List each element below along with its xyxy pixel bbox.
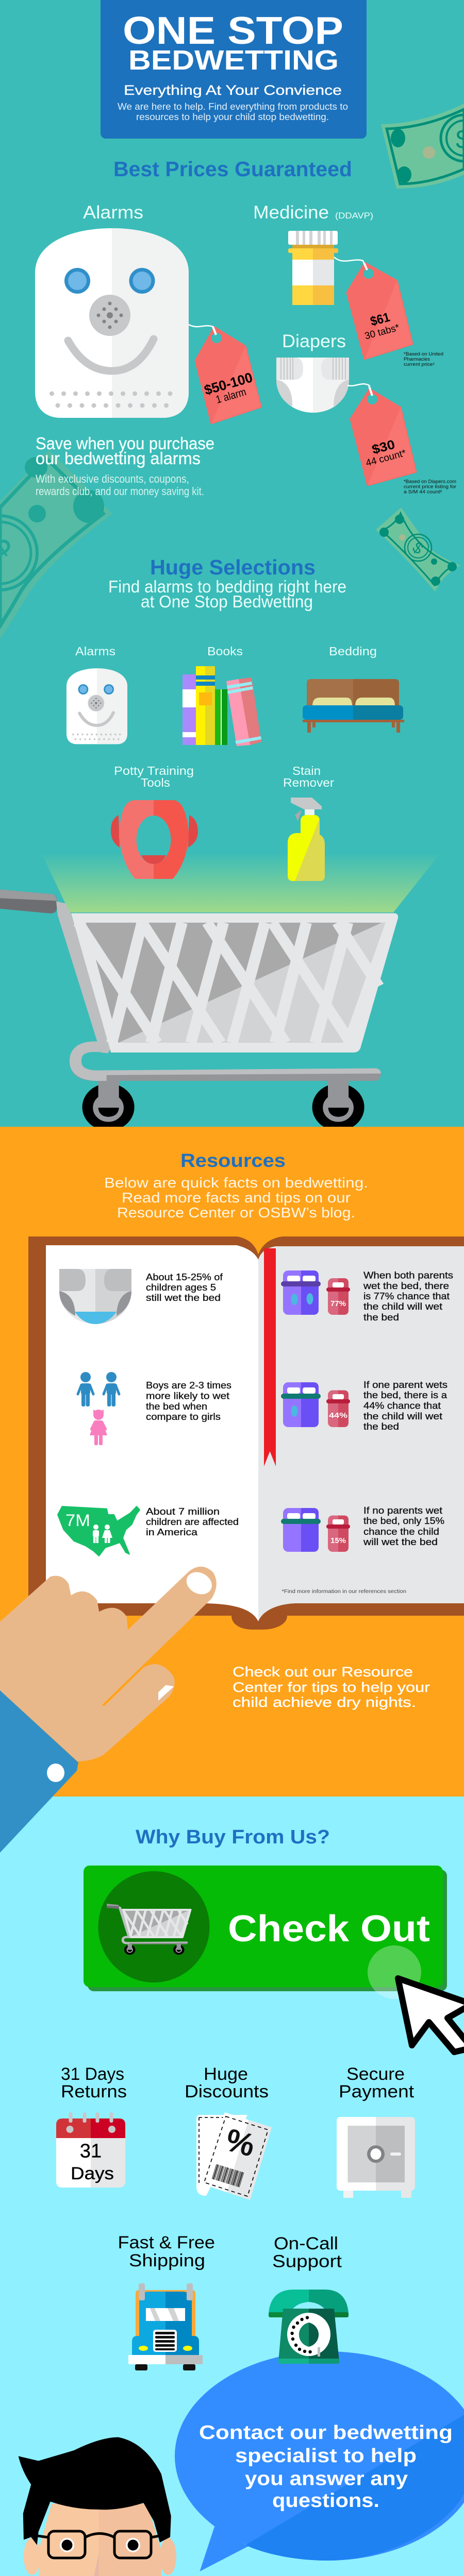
- icon: safe: [337, 2117, 415, 2198]
- fact: one parent: [363, 1379, 448, 1432]
- fact: boys more likely: more likely to wet: [146, 1390, 229, 1401]
- panel: orange resources section: [0, 1127, 464, 1853]
- fact: boys more likely: Boys are 2-3 times: [146, 1380, 231, 1391]
- label: fast and free shipping: Fast & Free: [118, 2233, 215, 2252]
- icon: spray bottle: [288, 798, 325, 881]
- fact: one parent: 44% chance that: [363, 1400, 441, 1411]
- bubble text: you answer any: [245, 2468, 408, 2489]
- label: 31 days returns: Returns: [61, 2082, 127, 2102]
- fact: 7 million: [146, 1506, 239, 1537]
- icon: big alarm device: [35, 228, 189, 418]
- fact: boys more likely: the bed when: [146, 1401, 207, 1412]
- text: save when you purchase: rewards club, and our money saving kit.: [36, 485, 204, 498]
- title panel: ONE STOP: [123, 9, 343, 52]
- icon: pointing hand: [0, 1567, 217, 1761]
- fact: 7 million: About 7 million: [146, 1506, 220, 1517]
- label: 31 days returns: [61, 2064, 127, 2102]
- icon: mouse cursor: [398, 1978, 464, 2052]
- label: bedding product: Bedding: [329, 645, 377, 658]
- label: fast and free shipping: Shipping: [129, 2251, 205, 2270]
- note: medicine price source: *Based on United: [404, 351, 443, 357]
- note: medicine price source: [404, 351, 443, 367]
- label: huge discounts: Discounts: [185, 2082, 269, 2102]
- bookmark ribbon: [264, 1248, 276, 1466]
- title panel: Everything At Your Convience: [124, 82, 342, 98]
- check out label: Check Out: [228, 1908, 430, 1950]
- text: resources intro: [104, 1175, 368, 1221]
- fact: no parents: If no parents wet: [363, 1505, 442, 1516]
- fact: boys more likely: [146, 1380, 231, 1422]
- note: medicine price source: current price¹: [404, 362, 435, 367]
- icon: boys and girl: [78, 1372, 119, 1445]
- text: save when you purchase: our bedwetting alarms: [36, 449, 201, 468]
- label: fast and free shipping: [118, 2233, 215, 2270]
- label: potty training tools: Potty Training: [114, 764, 194, 777]
- text: check out resource center: child achieve dry nights.: [233, 1694, 416, 1710]
- price tag: diapers: [347, 384, 416, 485]
- fact: one parent: the bed, there is a: [363, 1389, 448, 1400]
- label: stain remover: [283, 764, 334, 789]
- label: alarms: Alarms: [83, 202, 143, 223]
- label: potty training tools: [114, 764, 194, 789]
- label: ddavp: (DDAVP): [335, 211, 373, 221]
- fact: both parents: wet the bed, there: [363, 1280, 449, 1291]
- icon: calendar: 31: [80, 2140, 102, 2162]
- icon: no parents bed 15 percent: 15%: [330, 1536, 346, 1545]
- note: diapers price source: *Based on Diapers.com: [404, 479, 456, 484]
- fact: both parents: the bed: [363, 1312, 399, 1323]
- icon: coupons: [196, 2112, 272, 2200]
- label: stain remover: Stain: [292, 764, 321, 777]
- label: huge discounts: [185, 2064, 269, 2102]
- label: secure payment: Secure: [346, 2064, 405, 2084]
- button cart circle: [98, 1871, 209, 1982]
- title panel: BEDWETTING: [128, 45, 339, 76]
- icon: coupons: %: [222, 2122, 259, 2164]
- fact: one parent: the child will wet: [363, 1411, 442, 1421]
- fact: 15-25 percent: About 15-25% of: [146, 1272, 223, 1282]
- text: find alarms to bedding: at One Stop Bedwetting: [141, 592, 313, 611]
- text: resources intro: Resource Center or OSBW’s blog.: [117, 1205, 355, 1221]
- fact: both parents: When both parents: [363, 1269, 453, 1281]
- fact: 15-25 percent: children ages 5: [146, 1282, 216, 1293]
- bubble text: questions.: [272, 2490, 379, 2512]
- price tag: diapers: $30: [370, 437, 396, 457]
- label: potty training tools: Tools: [141, 776, 170, 789]
- label: huge discounts: Huge: [204, 2064, 248, 2084]
- price tag: medicine: $61: [369, 310, 391, 329]
- panel: teal products section: [0, 0, 464, 1133]
- fact: both parents: is 77% chance that: [363, 1291, 450, 1301]
- text: check out resource center: Check out our Resource: [233, 1664, 413, 1680]
- icon: wet diaper: [59, 1269, 131, 1324]
- text: save when you purchase: Save when you purchase: [36, 434, 214, 453]
- icon: one parent bed 44 percent: [281, 1382, 350, 1427]
- fact: boys more likely: compare to girls: [146, 1411, 221, 1422]
- icon: bed: [303, 679, 404, 733]
- price tag: medicine: [334, 257, 412, 359]
- icon: books: [183, 666, 261, 746]
- fact: 15-25 percent: [146, 1272, 223, 1303]
- price tag: alarm: 1 alarm: [214, 386, 247, 406]
- heading: resources: Resources: [180, 1150, 286, 1171]
- icon: small alarm: [67, 668, 127, 744]
- text: save when you purchase: With exclusive discounts, coupons,: [36, 472, 189, 485]
- icon: one parent bed 44 percent: 44%: [329, 1411, 347, 1420]
- label: secure payment: [339, 2064, 415, 2102]
- fact: 7 million: children are affected: [146, 1516, 239, 1527]
- icon: calendar: Days: [71, 2164, 114, 2183]
- fact: one parent: If one parent wets: [363, 1379, 448, 1390]
- fact: 7 million: in America: [146, 1527, 198, 1537]
- bubble text: [199, 2422, 453, 2512]
- open book: [28, 1236, 464, 1630]
- icon: diaper: [276, 358, 349, 413]
- mini cart icon: [107, 1904, 191, 1955]
- label: secure payment: Payment: [339, 2082, 415, 2102]
- footnote: references: *Find more information in our references section: [281, 1588, 406, 1595]
- icon: potty seat: [111, 800, 198, 879]
- icon: US map 7M: [58, 1506, 140, 1556]
- label: alarms product: Alarms: [75, 645, 115, 658]
- label: 31 days returns: 31 Days: [61, 2064, 124, 2084]
- icon: dollar bill top right: [381, 104, 464, 189]
- price tag: alarm: $50-100: [203, 369, 254, 398]
- title panel: We are here to help. Find everything from products to: [118, 101, 348, 112]
- icon: rotary phone: [269, 2290, 349, 2364]
- icon: calendar: [56, 2112, 125, 2188]
- note: diapers price source: current price listing for: [404, 484, 456, 489]
- text: find alarms to bedding: Find alarms to bedding right here: [108, 577, 346, 596]
- icon: both parents bed 77 percent: [281, 1270, 350, 1315]
- check out button: [84, 1866, 447, 1999]
- price tag: medicine: 30 tabs*: [363, 322, 401, 342]
- fact: no parents: [363, 1505, 444, 1547]
- fact: no parents: chance the child: [363, 1526, 439, 1537]
- label: on-call support: Support: [272, 2251, 342, 2271]
- heading: why buy from us: Why Buy From Us?: [136, 1826, 330, 1848]
- label: on-call support: [272, 2234, 342, 2271]
- bubble text: Contact our bedwetting: [199, 2422, 453, 2444]
- text: check out resource center: [233, 1664, 430, 1710]
- text: check out resource center: Center for tips to help your: [233, 1680, 430, 1695]
- text: find alarms to bedding: [108, 577, 346, 611]
- text: resources intro: Read more facts and tips on our: [122, 1190, 351, 1206]
- note: diapers price source: [404, 479, 456, 495]
- fact: both parents: the child will wet: [363, 1301, 442, 1312]
- icon: medicine bottle: [288, 231, 338, 305]
- shirt cuff: [0, 1690, 78, 1853]
- icon: US map 7M: 7M: [65, 1511, 90, 1530]
- price tag: alarm: [189, 325, 261, 423]
- icon: truck: [128, 2283, 203, 2370]
- fact: one parent: the bed: [363, 1421, 399, 1432]
- label: medicine: Medicine: [253, 202, 329, 223]
- heading: best prices guaranteed: Best Prices Guaranteed: [113, 157, 352, 181]
- title panel: [101, 0, 367, 139]
- note: medicine price source: Pharmacies: [404, 357, 430, 362]
- character: doctor: [0, 2437, 407, 2576]
- fact: 15-25 percent: still wet the bed: [146, 1292, 221, 1303]
- text: resources intro: Below are quick facts on bedwetting.: [104, 1175, 368, 1191]
- click highlight: [368, 1945, 421, 1999]
- fact: no parents: the bed, only 15%: [363, 1515, 444, 1526]
- icon: both parents bed 77 percent: 77%: [330, 1299, 346, 1308]
- label: diapers: Diapers: [282, 331, 346, 351]
- icon: small dollar bill right: $: [409, 539, 426, 558]
- fact: both parents: [363, 1269, 453, 1323]
- icon: large dollar bill left: [0, 450, 112, 639]
- note: diapers price source: a S/M 44 count²: [404, 489, 442, 495]
- label: stain remover: Remover: [283, 776, 334, 789]
- title panel: resources to help your child stop bedwetting.: [136, 112, 329, 122]
- doctor head: [19, 2437, 176, 2576]
- label: books product: Books: [207, 645, 243, 658]
- panel: light blue why buy section: [0, 1797, 464, 2576]
- icon: no parents bed 15 percent: [281, 1508, 350, 1552]
- fact: no parents: will wet the bed: [363, 1536, 438, 1547]
- heading: huge selections: Huge Selections: [150, 555, 316, 579]
- bubble text: specialist to help: [235, 2445, 417, 2467]
- icon: shopping cart: [0, 890, 398, 1131]
- icon: small dollar bill right: [376, 507, 460, 591]
- label: on-call support: On-Call: [274, 2234, 338, 2253]
- text: save when you purchase: [36, 434, 214, 498]
- light beam above cart: [41, 853, 441, 912]
- speech bubble: [175, 2351, 464, 2571]
- price tag: diapers: 44 count*: [364, 448, 408, 469]
